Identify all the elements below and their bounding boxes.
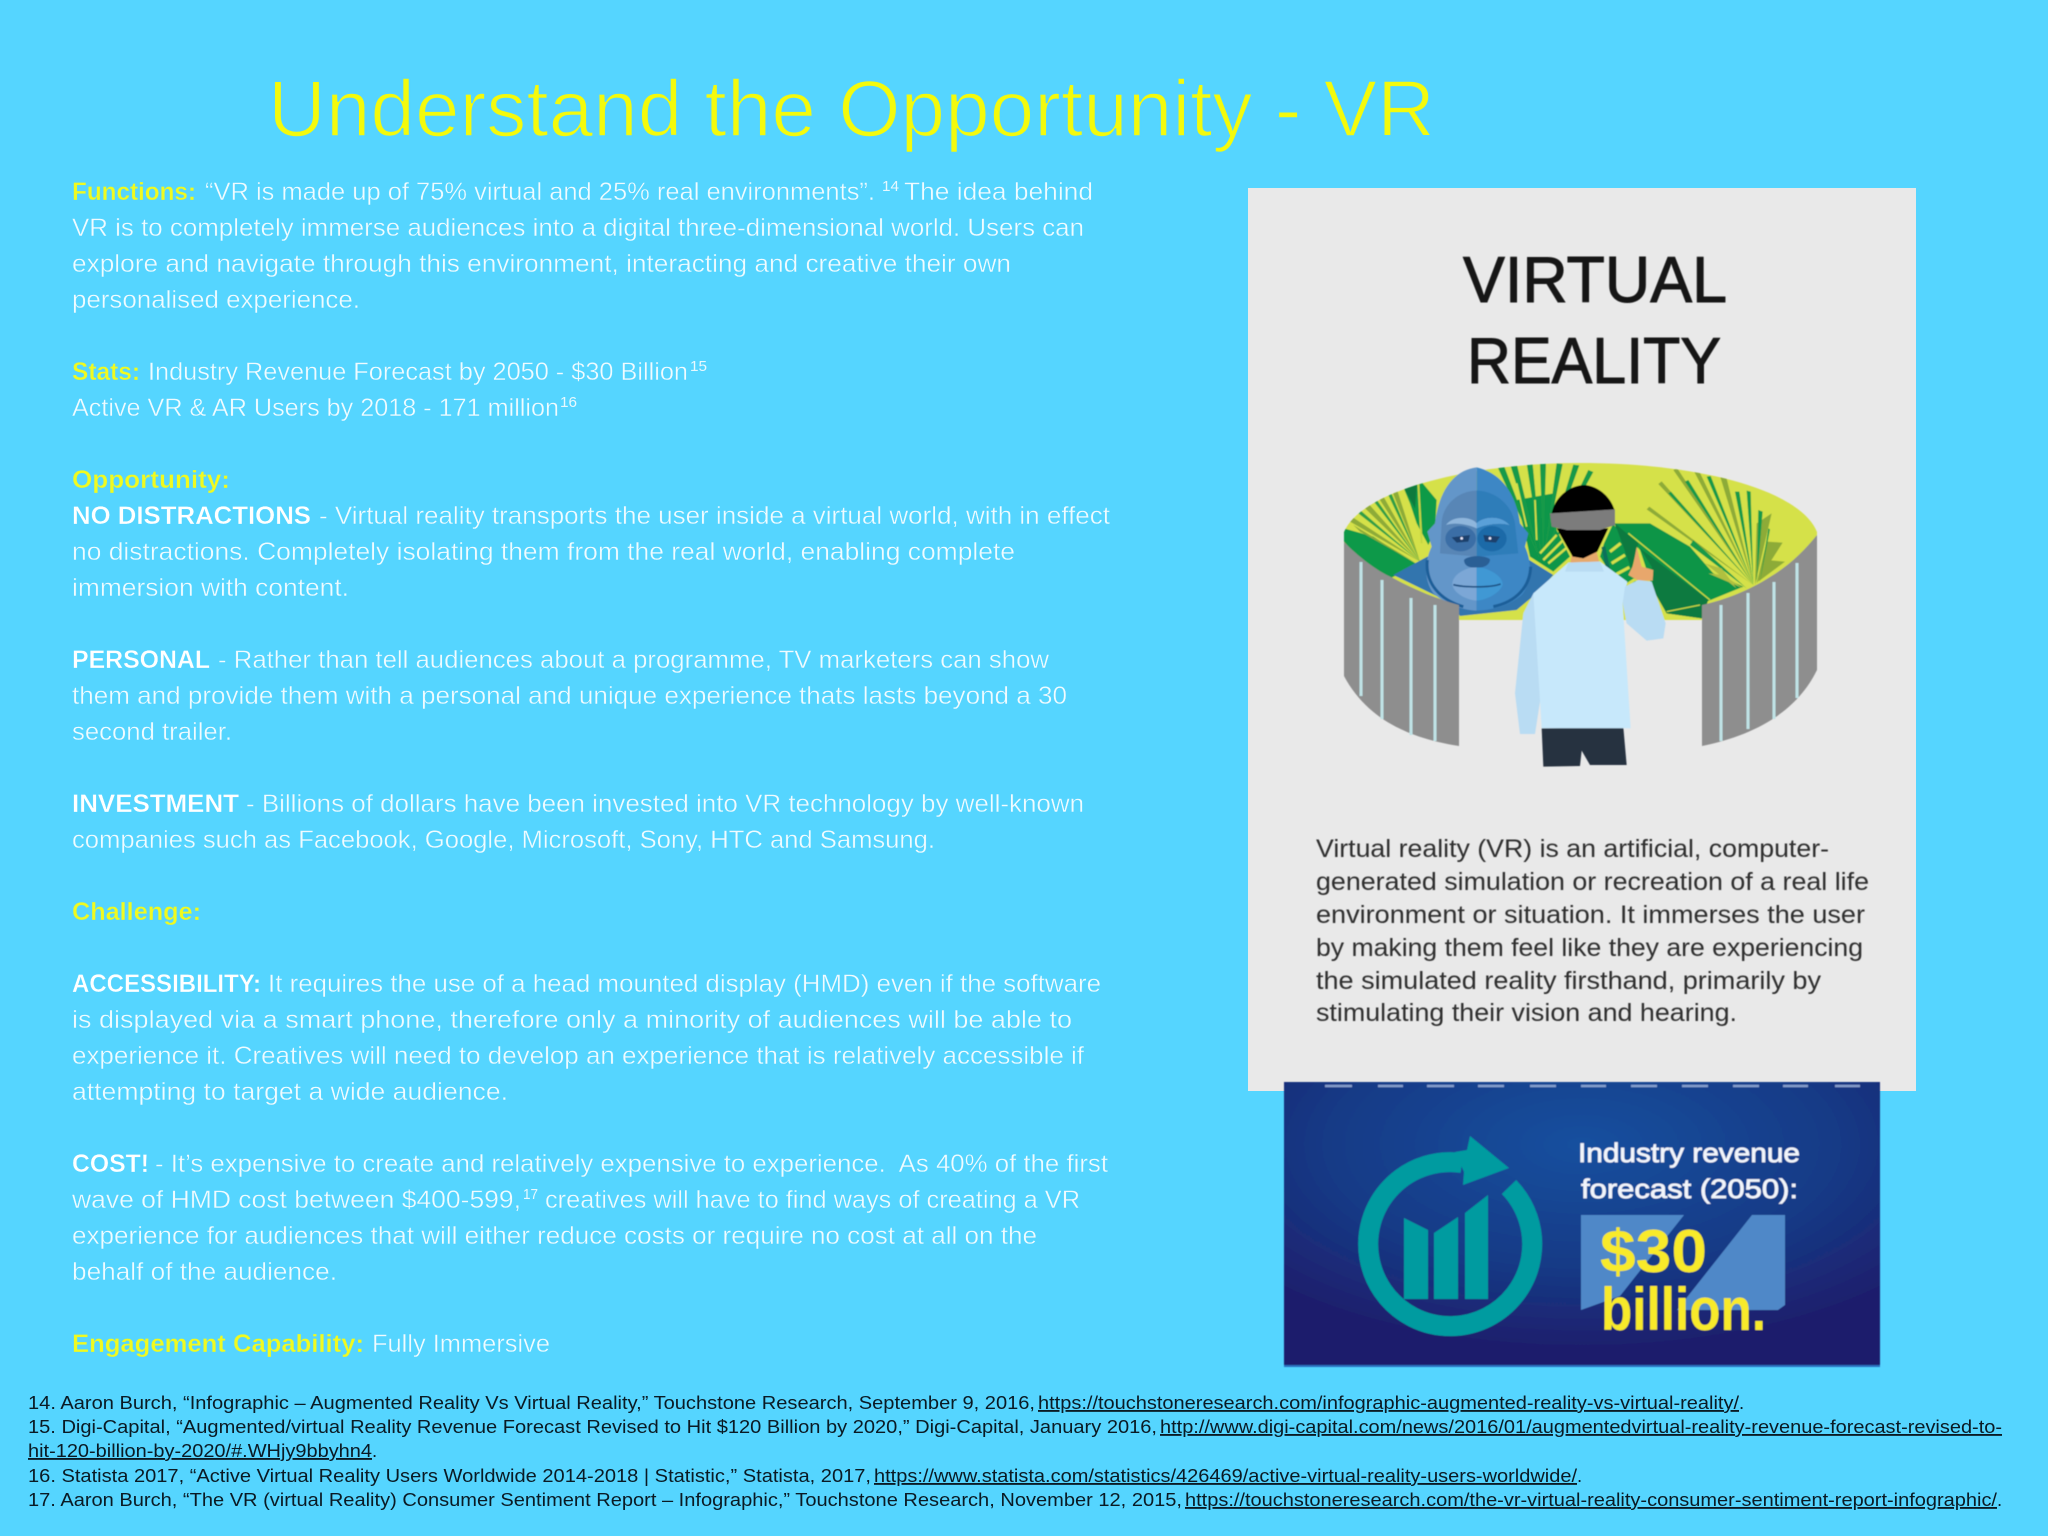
block: accessibility [72,970,1101,1106]
footnotes: https://touchstoneresearch.com/infographic-augmented-reality-vs-virtual-reality/ [1038,1392,1740,1413]
panel: industry revenue forecast image [1284,1082,1880,1367]
panel: virtual reality poster [1248,188,1916,1091]
footnotes: https://touchstoneresearch.com/the-vr-virtual-reality-consumer-sentiment-report-infographic/ [1185,1489,1998,1510]
block: cost [71,1150,1108,1286]
poster description: the simulated reality firsthand, primarily by [1316,967,1822,995]
block: accessibility: It requires the use of a head mounted display (HMD) even if the software [268,970,1101,998]
block: investment: INVESTMENT [72,790,239,818]
footnotes: . [372,1440,377,1461]
block: cost: - It’s expensive to create and relatively expensive to experience. As 40% of the first [155,1150,1108,1178]
poster description: generated simulation or recreation of a real life [1316,868,1869,896]
block: cost: experience for audiences that will either reduce costs or require no cost at all on the [72,1222,1037,1250]
text column [71,178,1110,1358]
left foliage [1344,480,1437,578]
footnotes: hit-120-billion-by-2020/#.WHjy9bbyhn4 [28,1440,372,1461]
block: stats: Stats: [72,358,140,386]
block: cost: behalf of the audience. [72,1258,337,1286]
block: investment: - Billions of dollars have been invested into VR technology by well-known [246,790,1084,818]
footnotes: . [1577,1465,1582,1486]
title: Understand the Opportunity - VR [268,64,1435,153]
grass behind man [1497,463,1593,572]
poster description: Virtual reality (VR) is an artificial, computer- [1316,835,1829,863]
footnotes: . [1739,1392,1744,1413]
block: investment: companies such as Facebook, Google, Microsoft, Sony, HTC and Samsung. [72,826,935,854]
block: engagement capability [72,1330,550,1358]
right foliage [1615,468,1785,618]
forecast label: forecast (2050): [1581,1174,1798,1204]
block: cost: 17 [523,1186,538,1203]
block: stats: Active VR & AR Users by 2018 - 171 million [72,394,559,422]
block: functions: 14 [882,178,899,195]
block: cost: creatives will have to find ways of creating a VR [545,1186,1080,1214]
block: engagement capability: Fully Immersive [372,1330,550,1358]
block: no distractions: immersion with content. [72,574,349,602]
block: no distractions: - Virtual reality transports the user inside a virtual world, with in effect [319,502,1110,530]
footnotes [28,1392,2002,1510]
block: personal: second trailer. [72,718,232,746]
block: personal [72,646,1067,746]
block: personal: PERSONAL [72,646,210,674]
block: cost: wave of HMD cost between $400-599, [71,1186,521,1214]
forecast label [1578,1138,1800,1204]
footnotes: 15. Digi-Capital, “Augmented/virtual Reality Revenue Forecast Revised to Hit $120 Billion by 2020,” Digi-Capital, January 2016, [28,1416,1157,1437]
poster description [1316,835,1869,1027]
striped leaf beside man [1600,523,1640,593]
block: engagement capability: Engagement Capability: [72,1330,364,1358]
poster heading [1463,243,1727,397]
block: stats: Industry Revenue Forecast by 2050 - $30 Billion [148,358,688,386]
heading: challenge: Challenge: [72,898,201,926]
block: functions: VR is to completely immerse audiences into a digital three-dimensional world. Users can [72,214,1084,242]
gorilla [1393,467,1553,616]
man with headset [1515,485,1666,767]
block: functions: explore and navigate through this environment, interacting and creative their own [72,250,1011,278]
forecast label: Industry revenue [1578,1138,1800,1168]
block: personal: - Rather than tell audiences about a programme, TV marketers can show [218,646,1050,674]
footnotes: 16. Statista 2017, “Active Virtual Reality Users Worldwide 2014-2018 | Statistic,” Statista, 2017, [28,1465,871,1486]
footnotes: https://www.statista.com/statistics/426469/active-virtual-reality-users-worldwide/ [874,1465,1578,1486]
block: investment [72,790,1084,854]
block: no distractions [72,502,1110,602]
illustration: person in VR headset in a cylinder with gorilla [1340,460,1820,767]
block: accessibility: is displayed via a smart phone, therefore only a minority of audiences will be able to [72,1006,1072,1034]
poster heading: VIRTUAL [1463,243,1727,316]
heading: opportunity: Opportunity: [72,466,230,494]
value [1600,1218,1766,1343]
decorative blue backing shapes [1581,1215,1785,1310]
block: functions: “VR is made up of 75% virtual and 25% real environments”. [205,178,875,206]
block: stats: 16 [560,394,577,411]
block: stats: 15 [690,358,707,375]
right wall [1702,535,1817,746]
jungle scene [1340,460,1820,625]
left wall [1344,542,1459,746]
poster heading: REALITY [1467,324,1721,397]
poster description: stimulating their vision and hearing. [1316,999,1737,1027]
footnotes: 17. Aaron Burch, “The VR (virtual Reality) Consumer Sentiment Report – Infographic,” Touchstone Research, November 12, 2015, [28,1489,1182,1510]
icon: growth chart in circular arrow [1368,1136,1532,1326]
block: accessibility: ACCESSIBILITY: [72,970,261,998]
block: personal: them and provide them with a personal and unique experience thats lasts beyond a 30 [72,682,1067,710]
block: accessibility: experience it. Creatives will need to develop an experience that is relatively accessible if [72,1042,1084,1070]
block: stats [72,358,707,422]
footnotes: 14. Aaron Burch, “Infographic – Augmented Reality Vs Virtual Reality,” Touchstone Research, September 9, 2016, [28,1392,1035,1413]
footnotes: . [1997,1489,2002,1510]
block: no distractions: no distractions. Completely isolating them from the real world, enabling complete [72,538,1015,566]
block: no distractions: NO DISTRACTIONS [72,502,311,530]
block: functions [72,178,1093,314]
block: functions: personalised experience. [72,286,360,314]
block: functions: Functions: [72,178,196,206]
block: accessibility: attempting to target a wide audience. [72,1078,508,1106]
block: cost: COST! [72,1150,149,1178]
poster description: environment or situation. It immerses the user [1316,901,1865,929]
value: billion. [1601,1276,1766,1343]
block: functions: The idea behind [904,178,1093,206]
poster description: by making them feel like they are experiencing [1316,934,1863,962]
footnotes: http://www.digi-capital.com/news/2016/01/augmentedvirtual-reality-revenue-forecast-revised-to- [1160,1416,2002,1437]
value: $30 [1600,1218,1707,1285]
